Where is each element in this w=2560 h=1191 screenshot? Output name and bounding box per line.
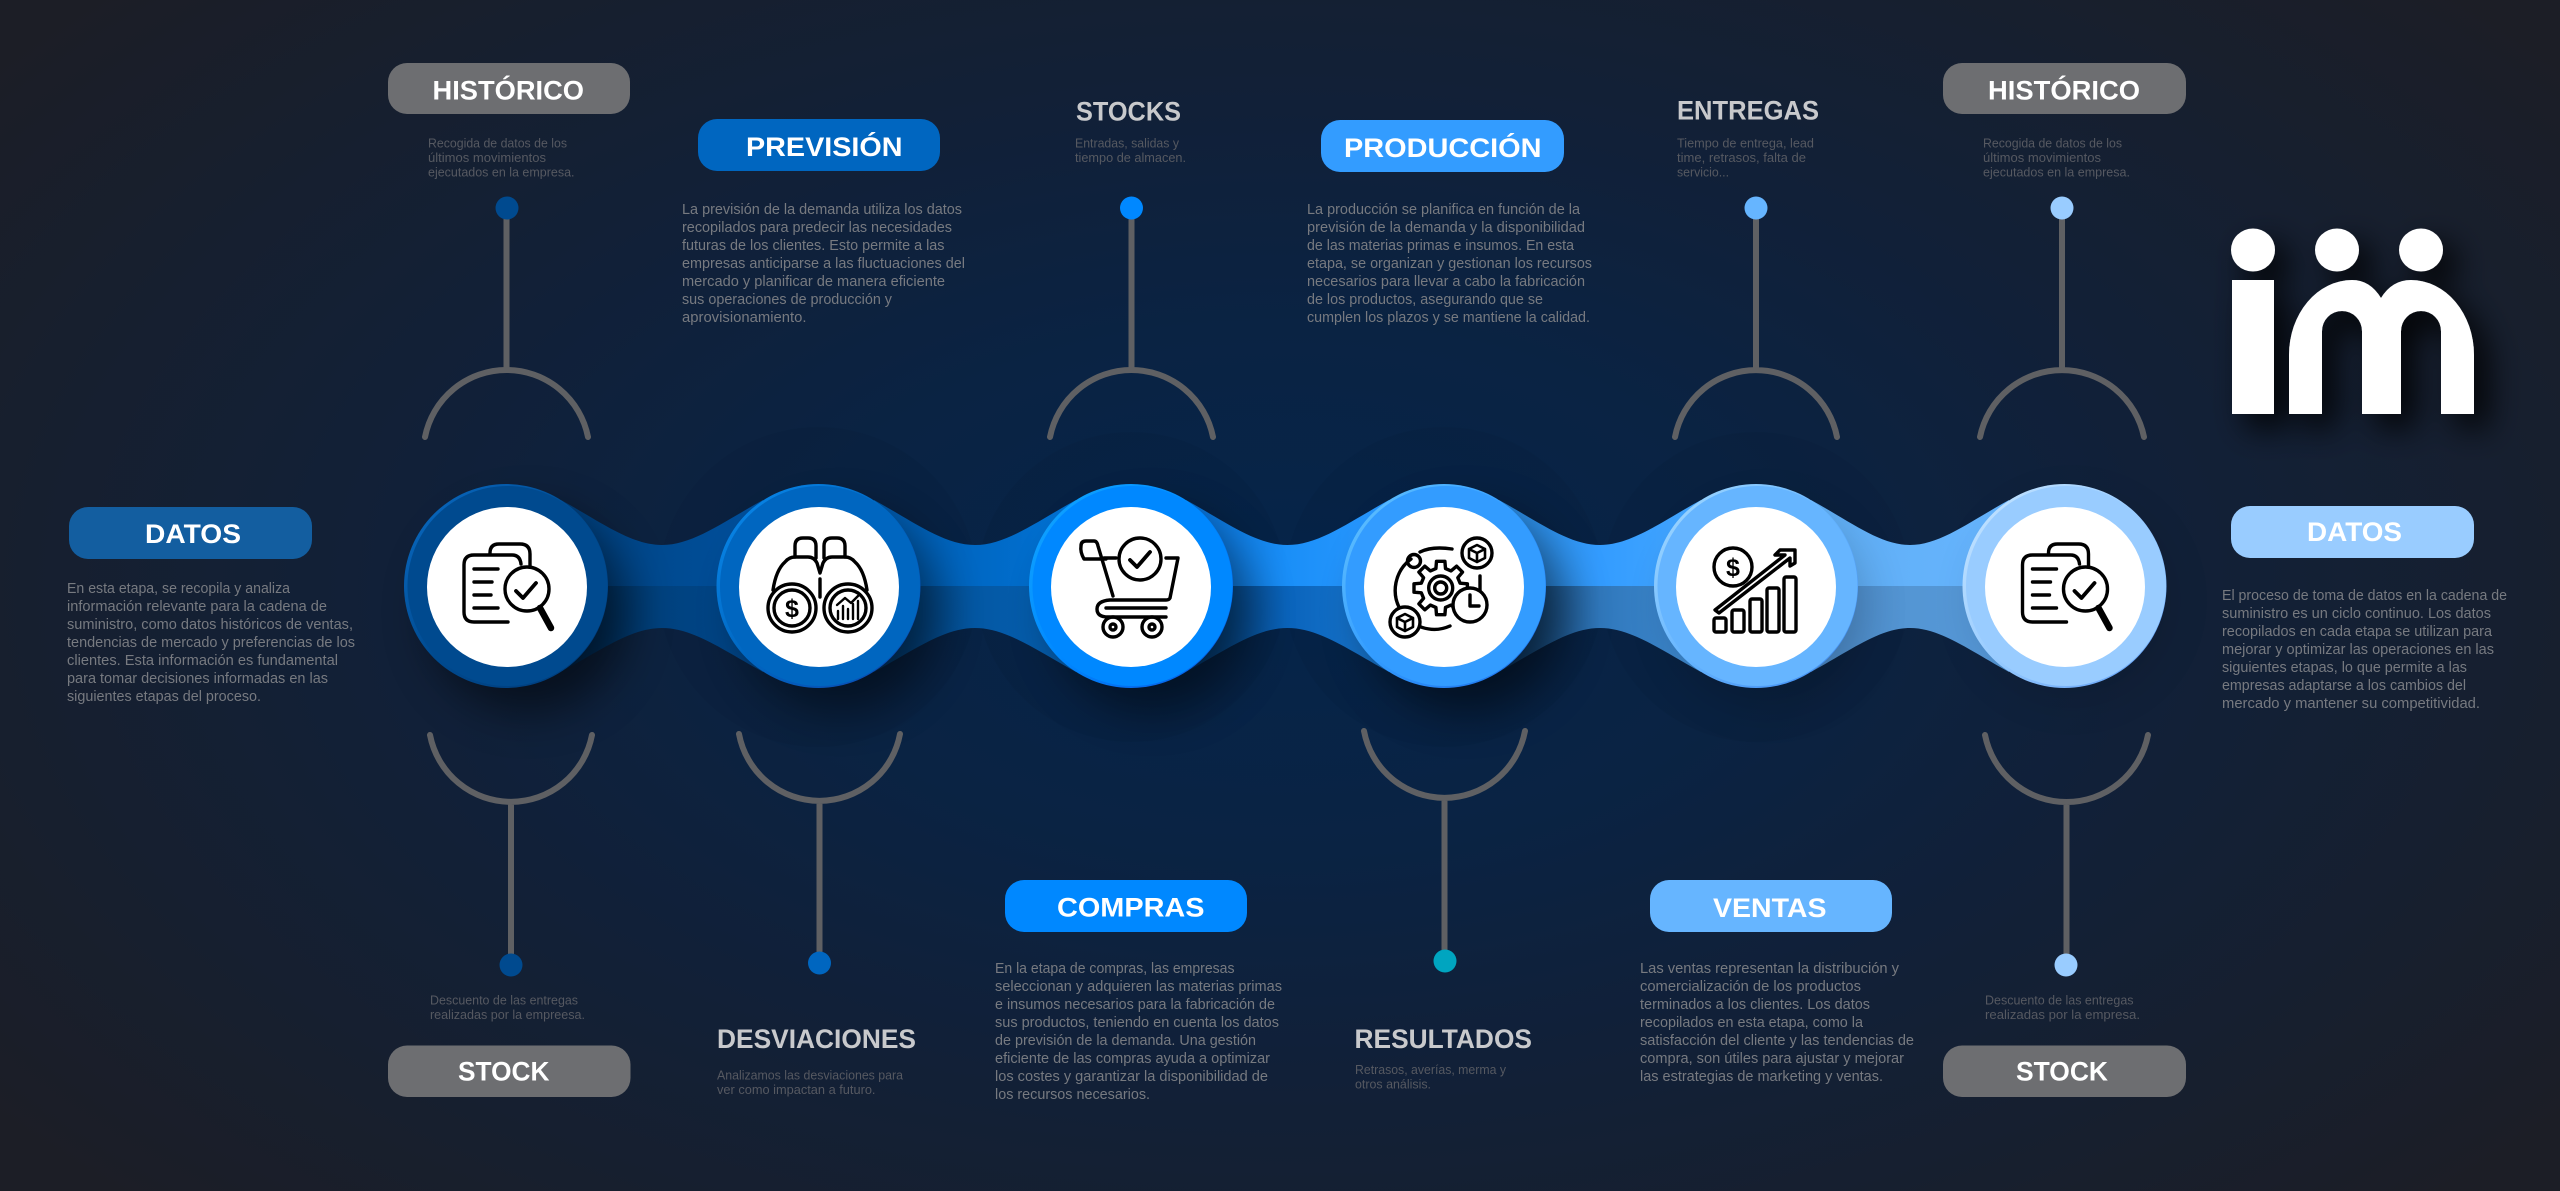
text: compras: seleccionan y adquieren las materias primas (995, 978, 1282, 995)
text: datos: empresas adaptarse a los cambios del (2222, 677, 2466, 694)
stage chain: connected circles with icons (404, 484, 2170, 712)
stage circle 2: previsión (716, 484, 920, 688)
heading pill: stock (1943, 1046, 2186, 1097)
text: compras: En la etapa de compras, las empresas (995, 960, 1234, 977)
panel: datos derecha (2222, 506, 2507, 712)
panel: histórico izquierda (388, 63, 630, 437)
text: datos: siguientes etapas, lo que permite a las (2222, 659, 2467, 676)
text: histórico (428, 136, 574, 180)
heading pill: previsión (698, 119, 940, 171)
text: producción: previsión de la demanda y la disponibilidad (1307, 219, 1585, 236)
text: histórico: últimos movimientos (428, 150, 546, 165)
text: entregas: time, retrasos, falta de (1677, 150, 1806, 165)
text: previsión: recopilados para predecir las necesidades (682, 219, 952, 236)
panel: compras (995, 880, 1282, 1103)
text: ventas (1640, 960, 1914, 1085)
panel: stock izquierda (388, 735, 630, 1097)
heading pill: ventas: VENTAS (1713, 893, 1826, 923)
text: previsión: aprovisionamiento. (682, 309, 806, 326)
text: histórico: ejecutados en la empresa. (428, 164, 574, 180)
icon: gear with boxes and clock (1390, 538, 1492, 637)
text: stock: realizadas por la empresa. (1985, 1007, 2140, 1022)
text: ventas: compra, son útiles para ajustar y mejorar (1640, 1050, 1904, 1067)
panel: desviaciones (717, 734, 916, 1097)
text: previsión: empresas anticiparse a las fluctuaciones del (682, 255, 965, 272)
connector stem and arc (430, 735, 592, 976)
stage circle 3: compras (1029, 484, 1233, 688)
text: compras: eficiente de las compras ayuda a optimizar (995, 1050, 1270, 1067)
text: stock: realizadas por la empreesa. (430, 1007, 585, 1022)
heading pill: producción (1321, 120, 1564, 172)
text: compras: sus productos, teniendo en cuenta los datos (995, 1014, 1279, 1031)
text: ventas: terminados a los clientes. Los datos (1640, 996, 1870, 1013)
heading pill: histórico (1943, 63, 2186, 114)
text: ventas: recopilados en esta etapa, como la (1640, 1014, 1864, 1031)
text: compras: e insumos necesarios para la fabricación de (995, 996, 1275, 1013)
panel: stock derecha (1943, 735, 2186, 1097)
text: producción: de las materias primas e insumos. En esta (1307, 237, 1575, 254)
connector stem and arc (1985, 735, 2148, 976)
icon: rising sales chart with coin (1714, 548, 1796, 632)
text: desviaciones (717, 1068, 904, 1097)
text: datos: En esta etapa, se recopila y analiza (67, 580, 291, 597)
stage circle 1: datos (404, 484, 608, 688)
heading: entregas: ENTREGAS (1677, 96, 1819, 126)
text: datos: recopilados en cada etapa se utilizan para (2222, 623, 2493, 640)
connector: producción to ventas (1499, 500, 1701, 672)
connector stem and arc (1050, 196, 1213, 437)
text: producción: La producción se planifica en función de la (1307, 201, 1581, 218)
text: entregas: Tiempo de entrega, lead (1677, 136, 1814, 150)
text: histórico: ejecutados en la empresa. (1983, 164, 2130, 180)
connector: datos to previsión (561, 500, 763, 672)
heading pill: datos (69, 507, 312, 559)
text: stocks: Entradas, salidas y (1075, 136, 1179, 150)
stage circle 4: producción (1342, 484, 1546, 688)
stage circle 5: ventas (1654, 484, 1858, 688)
heading pill: histórico: HISTÓRICO (1988, 74, 2140, 106)
heading pill: compras: COMPRAS (1057, 892, 1204, 922)
text: previsión (682, 201, 965, 326)
heading pill: stock: STOCK (458, 1056, 550, 1086)
text: ventas: comercialización de los productos (1640, 978, 1861, 995)
heading pill: producción: PRODUCCIÓN (1344, 132, 1542, 163)
connector: previsión to compras (874, 500, 1076, 672)
heading pill: compras (1005, 880, 1247, 932)
text: producción: necesarios para llevar a cabo la fabricación (1307, 273, 1585, 290)
text: stock: Descuento de las entregas (430, 992, 578, 1008)
text: entregas: servicio... (1677, 164, 1729, 180)
text: datos: siguientes etapas del proceso. (67, 688, 261, 705)
connector: ventas to datos final (1811, 500, 2009, 672)
text: stock (430, 992, 585, 1022)
text: compras (995, 960, 1282, 1103)
text: resultados: otros análisis. (1355, 1076, 1431, 1092)
panel: entregas (1675, 96, 1837, 437)
connector stem and arc (425, 196, 588, 437)
icon: document with magnifier (464, 544, 551, 628)
icon: shopping cart with check (1081, 538, 1178, 637)
text: previsión: futuras de los clientes. Esto permite a las (682, 237, 944, 254)
stage circle 6: datos final (1962, 484, 2166, 688)
panel: resultados (1354, 731, 1532, 1092)
icon: binoculars with dollar and chart (768, 538, 872, 632)
heading pill: histórico (388, 63, 630, 114)
heading pill: datos: DATOS (145, 519, 241, 549)
text: stocks (1075, 136, 1186, 165)
text: ventas: las estrategias de marketing y ventas. (1640, 1068, 1883, 1085)
panel: producción (1307, 120, 1592, 326)
heading: stocks: STOCKS (1076, 96, 1181, 126)
text: compras: de previsión de la demanda. Una gestión (995, 1032, 1256, 1049)
text: stock: Descuento de las entregas (1985, 992, 2134, 1008)
text: histórico: Recogida de datos de los (1983, 136, 2122, 150)
text: histórico: últimos movimientos (1983, 150, 2101, 165)
icon: rising sales chart with coin: $ (1726, 554, 1740, 582)
text: datos: El proceso de toma de datos en la cadena de (2222, 587, 2507, 604)
text: previsión: mercado y planificar de manera eficiente (682, 273, 945, 290)
heading: desviaciones: DESVIACIONES (717, 1024, 916, 1054)
text: previsión: La previsión de la demanda utiliza los datos (682, 201, 962, 218)
text: compras: los costes y garantizar la disponibilidad de (995, 1068, 1268, 1085)
text: producción: etapa, se organizan y gestionan los recursos (1307, 255, 1592, 272)
text: resultados: Retrasos, averías, merma y (1355, 1062, 1506, 1077)
logo (2231, 228, 2474, 414)
text: datos: información relevante para la cadena de (67, 598, 327, 615)
text: ventas: satisfacción del cliente y las tendencias de (1640, 1032, 1914, 1049)
heading pill: previsión: PREVISIÓN (746, 131, 902, 162)
text: datos: suministro, como datos históricos de ventas, (67, 616, 353, 633)
panel: stocks (1050, 96, 1213, 437)
heading: resultados: RESULTADOS (1354, 1024, 1532, 1054)
panel: previsión (682, 119, 965, 326)
text: datos: suministro es un ciclo continuo. Los datos (2222, 605, 2491, 622)
connector stem and arc (1980, 196, 2144, 437)
text: producción (1307, 201, 1592, 326)
icon: binoculars with dollar and chart: $ (785, 595, 799, 623)
text: datos: mercado y mantener su competitividad. (2222, 695, 2480, 712)
panel: datos izquierda (67, 507, 355, 705)
panel: ventas (1640, 880, 1914, 1085)
text: producción: de los productos, asegurando que se (1307, 291, 1543, 308)
text: desviaciones: Analizamos las desviaciones para (717, 1068, 904, 1082)
connector stem and arc (1675, 196, 1837, 437)
text: previsión: sus operaciones de producción y (682, 291, 892, 308)
text: desviaciones: ver como impactan a futuro. (717, 1082, 876, 1097)
text: histórico: Recogida de datos de los (428, 136, 567, 150)
text: datos (67, 580, 355, 705)
connector stem and arc (1364, 731, 1525, 972)
text: ventas: Las ventas representan la distribución y (1640, 960, 1899, 977)
heading pill: stock (388, 1046, 630, 1097)
text: stock (1985, 992, 2140, 1022)
text: producción: cumplen los plazos y se mantiene la calidad. (1307, 309, 1590, 326)
text: stocks: tiempo de almacen. (1075, 150, 1186, 165)
text: datos (2222, 587, 2507, 712)
text: datos: mejorar y optimizar las operaciones en las (2222, 641, 2494, 658)
panel: histórico derecha (1943, 63, 2186, 437)
text: datos: para tomar decisiones informadas en las (67, 670, 328, 687)
connector stem and arc (739, 734, 900, 974)
icon: document with magnifier (2022, 544, 2110, 628)
heading pill: stock: STOCK (2016, 1056, 2108, 1086)
connector: compras to producción (1186, 500, 1389, 672)
text: compras: los recursos necesarios. (995, 1086, 1150, 1103)
heading pill: histórico: HISTÓRICO (432, 74, 584, 106)
text: datos: clientes. Esta información es fundamental (67, 652, 338, 669)
text: histórico (1983, 136, 2130, 180)
text: datos: tendencias de mercado y preferencias de los (67, 634, 355, 651)
heading pill: ventas (1650, 880, 1892, 932)
heading pill: datos: DATOS (2307, 517, 2402, 547)
heading pill: datos (2231, 506, 2474, 558)
text: entregas (1677, 136, 1814, 180)
text: resultados (1355, 1062, 1506, 1092)
